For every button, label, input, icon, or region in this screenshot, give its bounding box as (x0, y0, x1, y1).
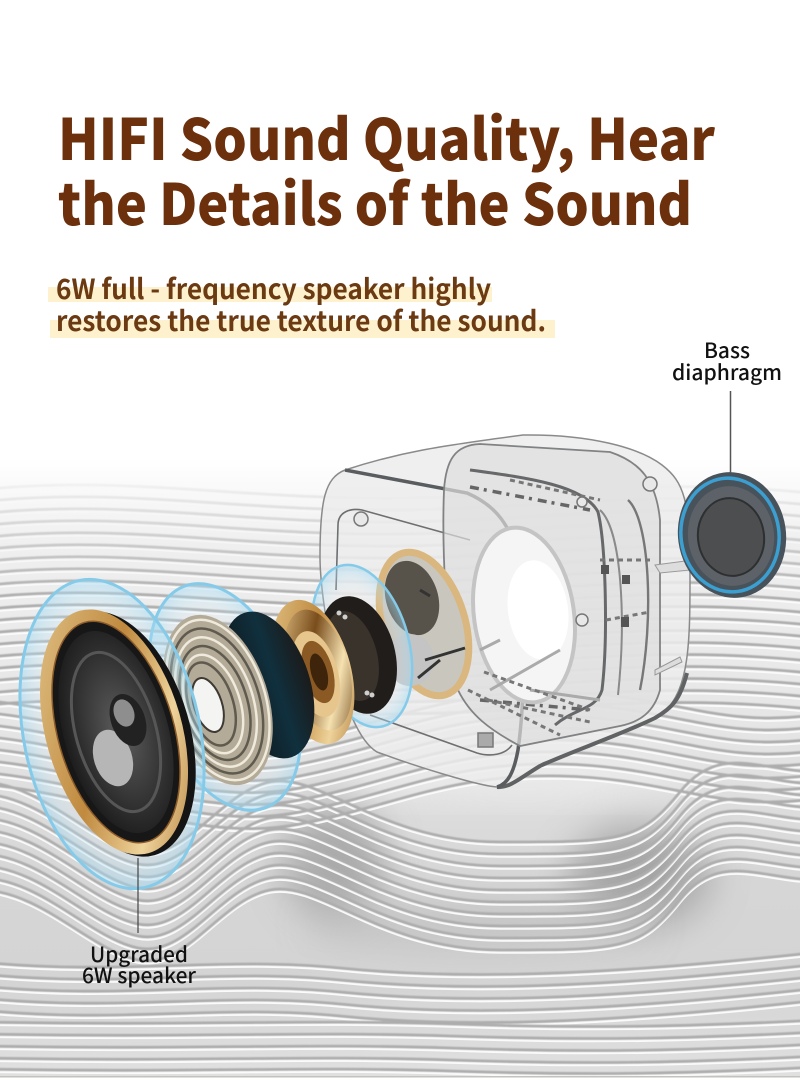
side tabs (655, 561, 690, 675)
callout line: bass diaphragm (730, 391, 732, 473)
background: white page with grey wave texture (0, 483, 800, 1078)
title (58, 95, 716, 242)
rear gold ring and frame (363, 541, 485, 707)
blue halo: front (0, 562, 231, 906)
front speaker driver (14, 592, 222, 874)
housing front rim (345, 470, 524, 787)
back module frame (443, 444, 660, 746)
label: upgraded 6W speaker (82, 939, 196, 990)
transparent speaker housing (320, 435, 690, 787)
housing dark lower rim (497, 673, 687, 787)
housing screw details (354, 477, 657, 747)
blue halo: rear (295, 554, 429, 738)
subtitle with yellow highlight bars (48, 268, 555, 340)
label: upgraded 6W speaker: 6W speaker (82, 960, 196, 990)
label: bass diaphragm: diaphragm (672, 357, 782, 387)
black ring behind coil (205, 600, 331, 770)
black spider basket (307, 587, 409, 723)
housing inner front frame (336, 510, 512, 755)
label: bass diaphragm: Bass (704, 335, 750, 365)
callout line: upgraded speaker (137, 858, 139, 933)
subtitle with yellow highlight bars: restores the true texture of the sound. (56, 300, 546, 340)
title: HIFI Sound Quality, Hear (58, 95, 716, 177)
label: upgraded 6W speaker: Upgraded (90, 939, 188, 969)
gold magnet cup (257, 591, 369, 753)
silver coil (143, 601, 293, 799)
blue halo: middle (121, 563, 329, 831)
exploded speaker assembly (0, 541, 485, 906)
label: bass diaphragm (672, 335, 782, 387)
subtitle with yellow highlight bars: 6W full - frequency speaker highly (56, 268, 491, 308)
title: the Details of the Sound (58, 160, 692, 242)
bass diaphragm (670, 465, 794, 605)
